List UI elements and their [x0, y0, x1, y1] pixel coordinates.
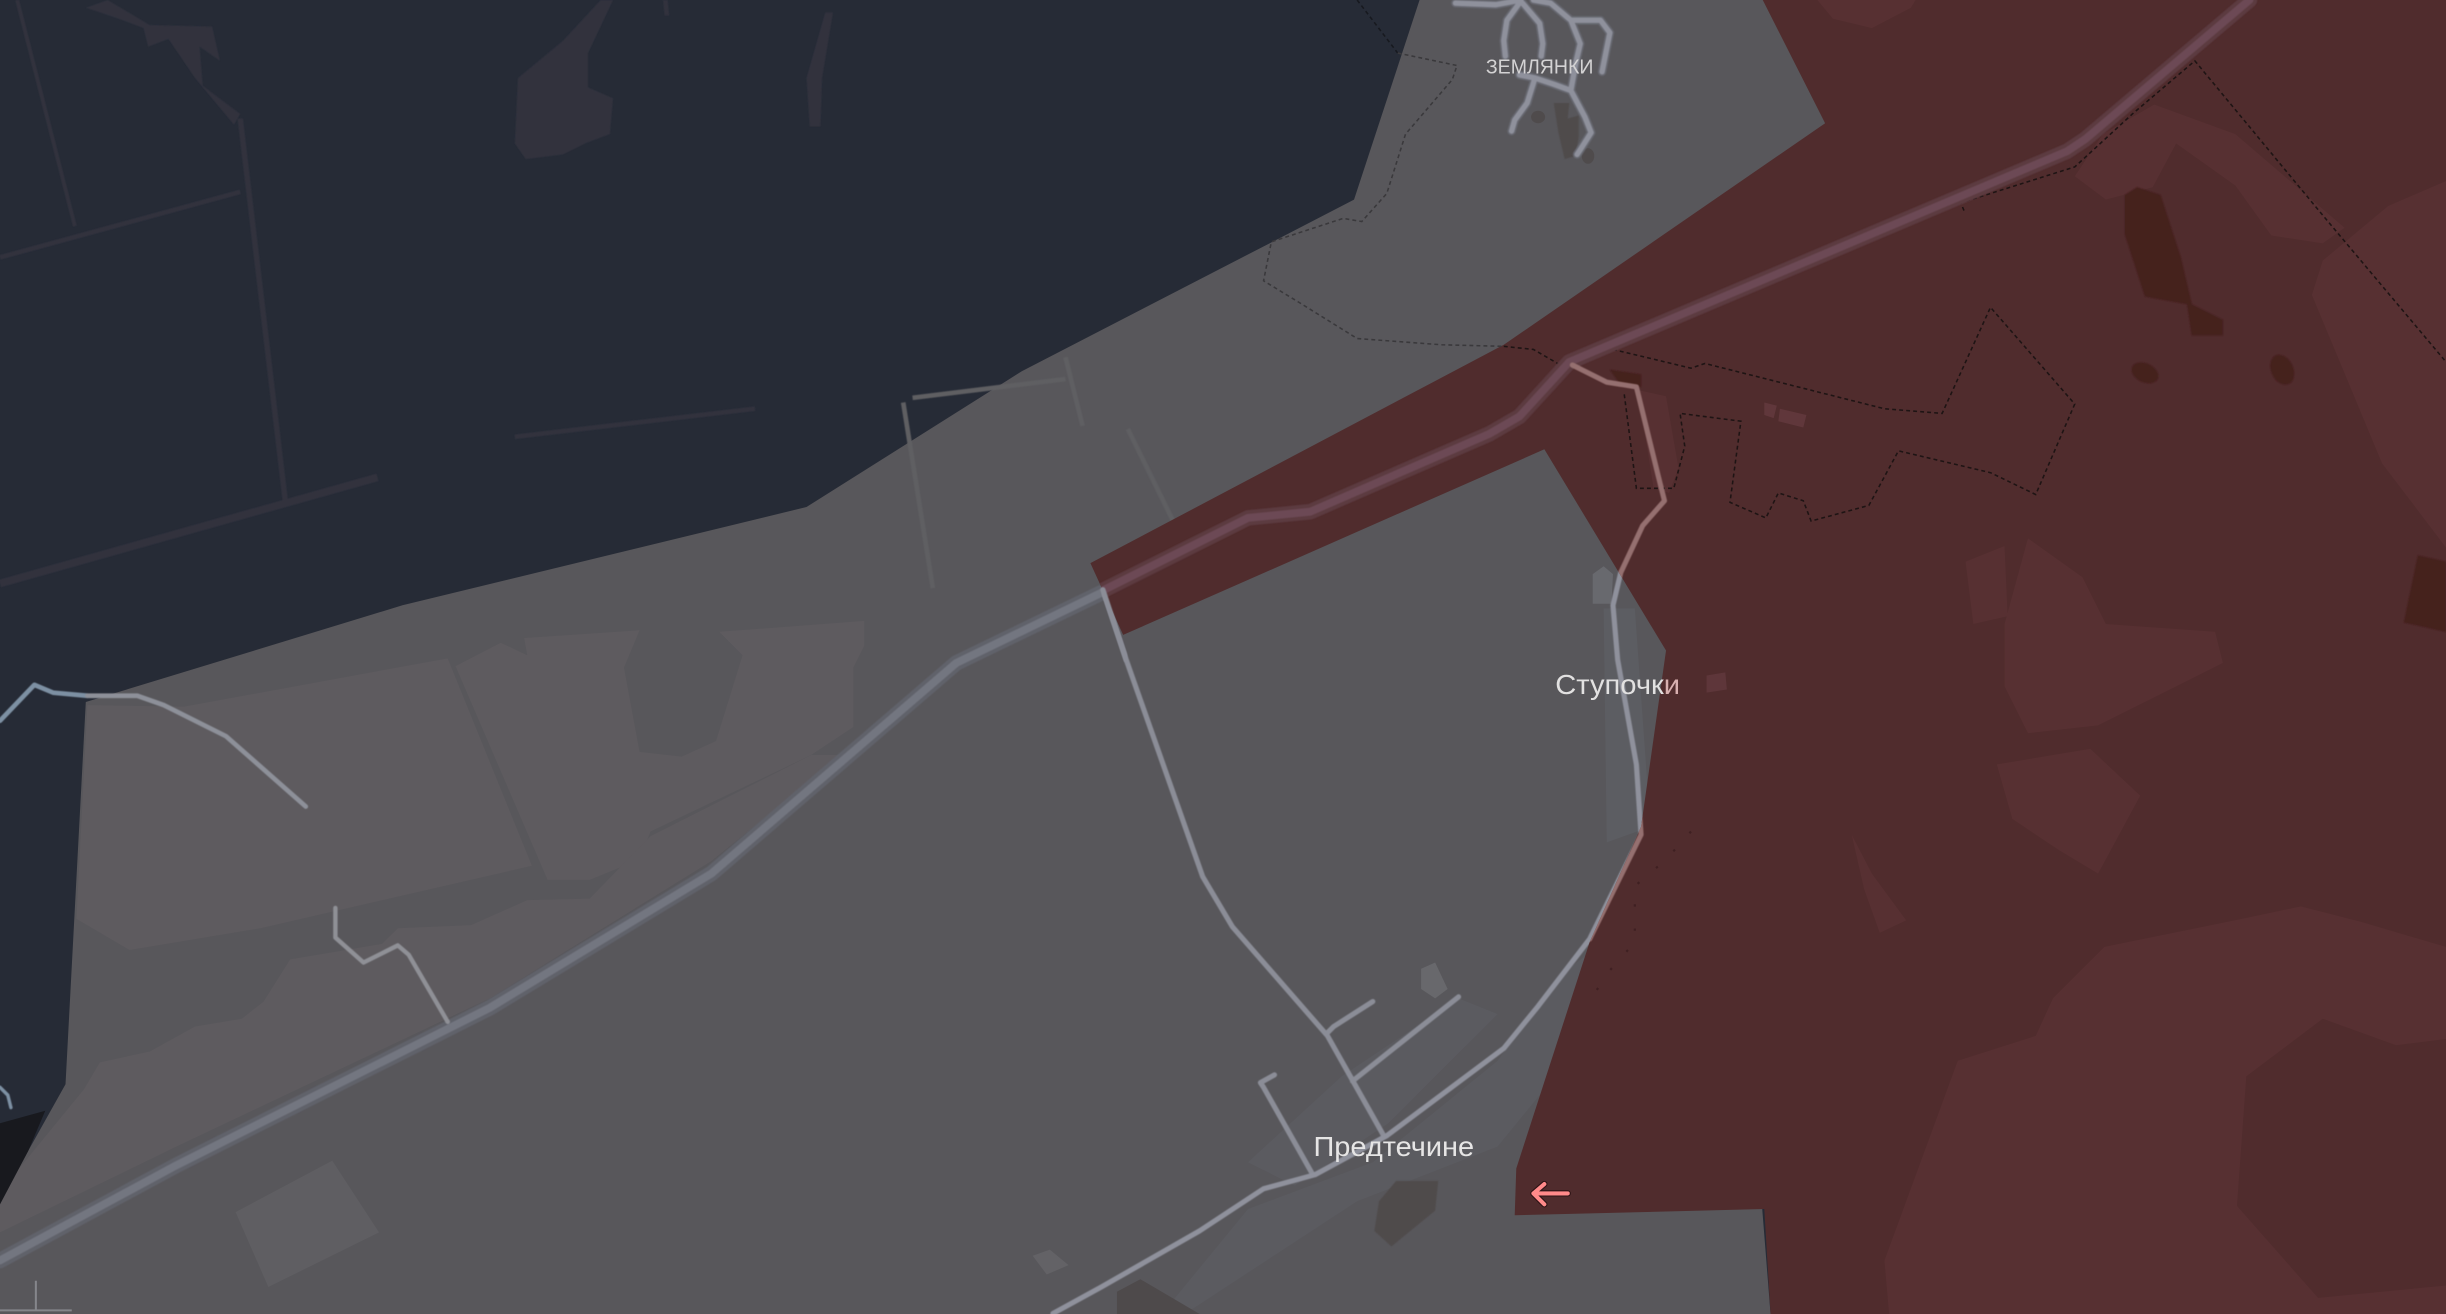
- fields in gray area: [0, 621, 1069, 1287]
- icon: advance arrow: [1533, 1184, 1568, 1204]
- roads within red area: [1092, 0, 2249, 939]
- village strips and ponds: [1117, 103, 1650, 1314]
- dark corner feature: [0, 1111, 45, 1204]
- roads over gray area: [0, 0, 1641, 1314]
- faint field tracks in gray area: [903, 357, 1178, 588]
- terrain patches in red area: [1706, 402, 1806, 692]
- navy terrain features: [0, 0, 833, 583]
- road crossing into white segment: [1103, 590, 1126, 660]
- label: Ступочки: Ступочк и: [1555, 669, 1680, 700]
- scale mark: [0, 1281, 72, 1310]
- dotted boundaries: [1264, 0, 2446, 998]
- panel: gray contested area: [0, 0, 1825, 1314]
- label: Предтечине: Предтечине: [1313, 1131, 1474, 1162]
- panel: red occupied area: [1090, 0, 2446, 1314]
- label: ЗЕМЛЯНКИ: ЗЕМЛЯНКИ: [1486, 56, 1593, 78]
- dark ponds in red area: [1610, 187, 2446, 632]
